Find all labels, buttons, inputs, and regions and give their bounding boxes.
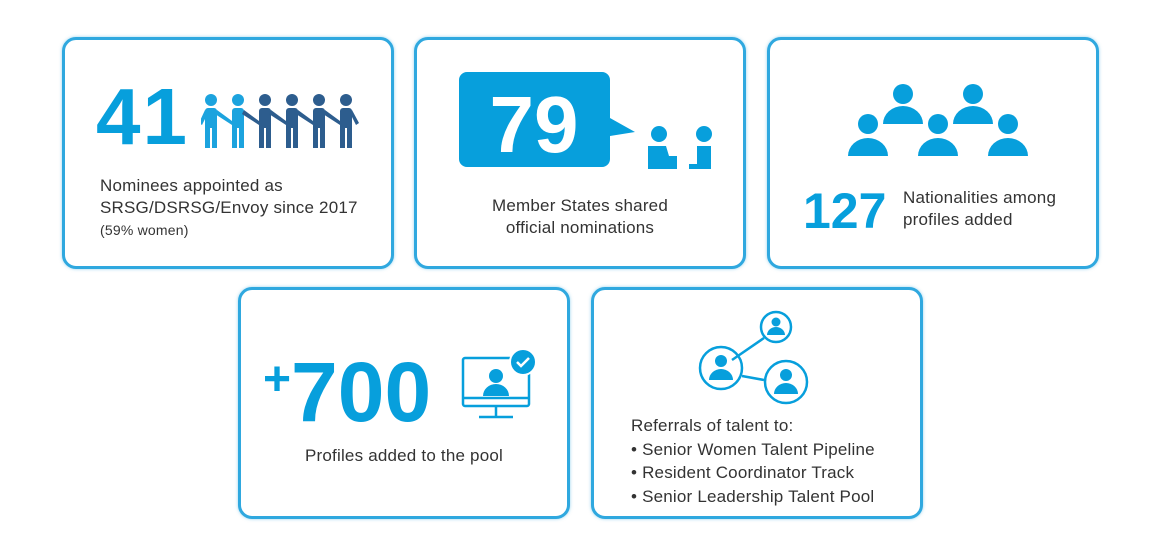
description: Nationalities among <box>903 188 1056 207</box>
description: Profiles added to the pool <box>305 446 503 465</box>
description: official nominations <box>506 218 654 237</box>
description: Member States shared <box>492 196 668 215</box>
panel: nominees <box>62 37 394 269</box>
icon: monitor with check <box>462 350 535 418</box>
icon: two people meeting <box>648 126 712 169</box>
description list: • Senior Leadership Talent Pool <box>631 486 874 506</box>
panel: profiles <box>238 287 570 519</box>
panel: referrals <box>591 287 923 519</box>
description <box>903 188 1056 229</box>
speech bubble 79 <box>459 72 712 169</box>
description list <box>631 416 875 506</box>
number 127: 127 <box>803 183 886 239</box>
description: (59% women) <box>100 222 189 238</box>
number +700: +700 <box>263 345 431 439</box>
icon: people chain <box>201 94 359 148</box>
description: profiles added <box>903 210 1013 229</box>
icon: group of people <box>848 84 1028 156</box>
description: Nominees appointed as <box>100 176 283 195</box>
icon: network of people <box>698 310 808 404</box>
description list: • Senior Women Talent Pipeline <box>631 440 875 458</box>
panel: nationalities <box>767 37 1099 269</box>
description list: • Resident Coordinator Track <box>631 463 854 482</box>
speech bubble 79: 79 <box>490 80 578 169</box>
panel: member states <box>414 37 746 269</box>
description <box>100 176 358 238</box>
number 41: 41 <box>96 72 189 161</box>
description list: Referrals of talent to: <box>631 416 793 435</box>
description: SRSG/DSRSG/Envoy since 2017 <box>100 198 358 217</box>
description <box>492 196 668 237</box>
